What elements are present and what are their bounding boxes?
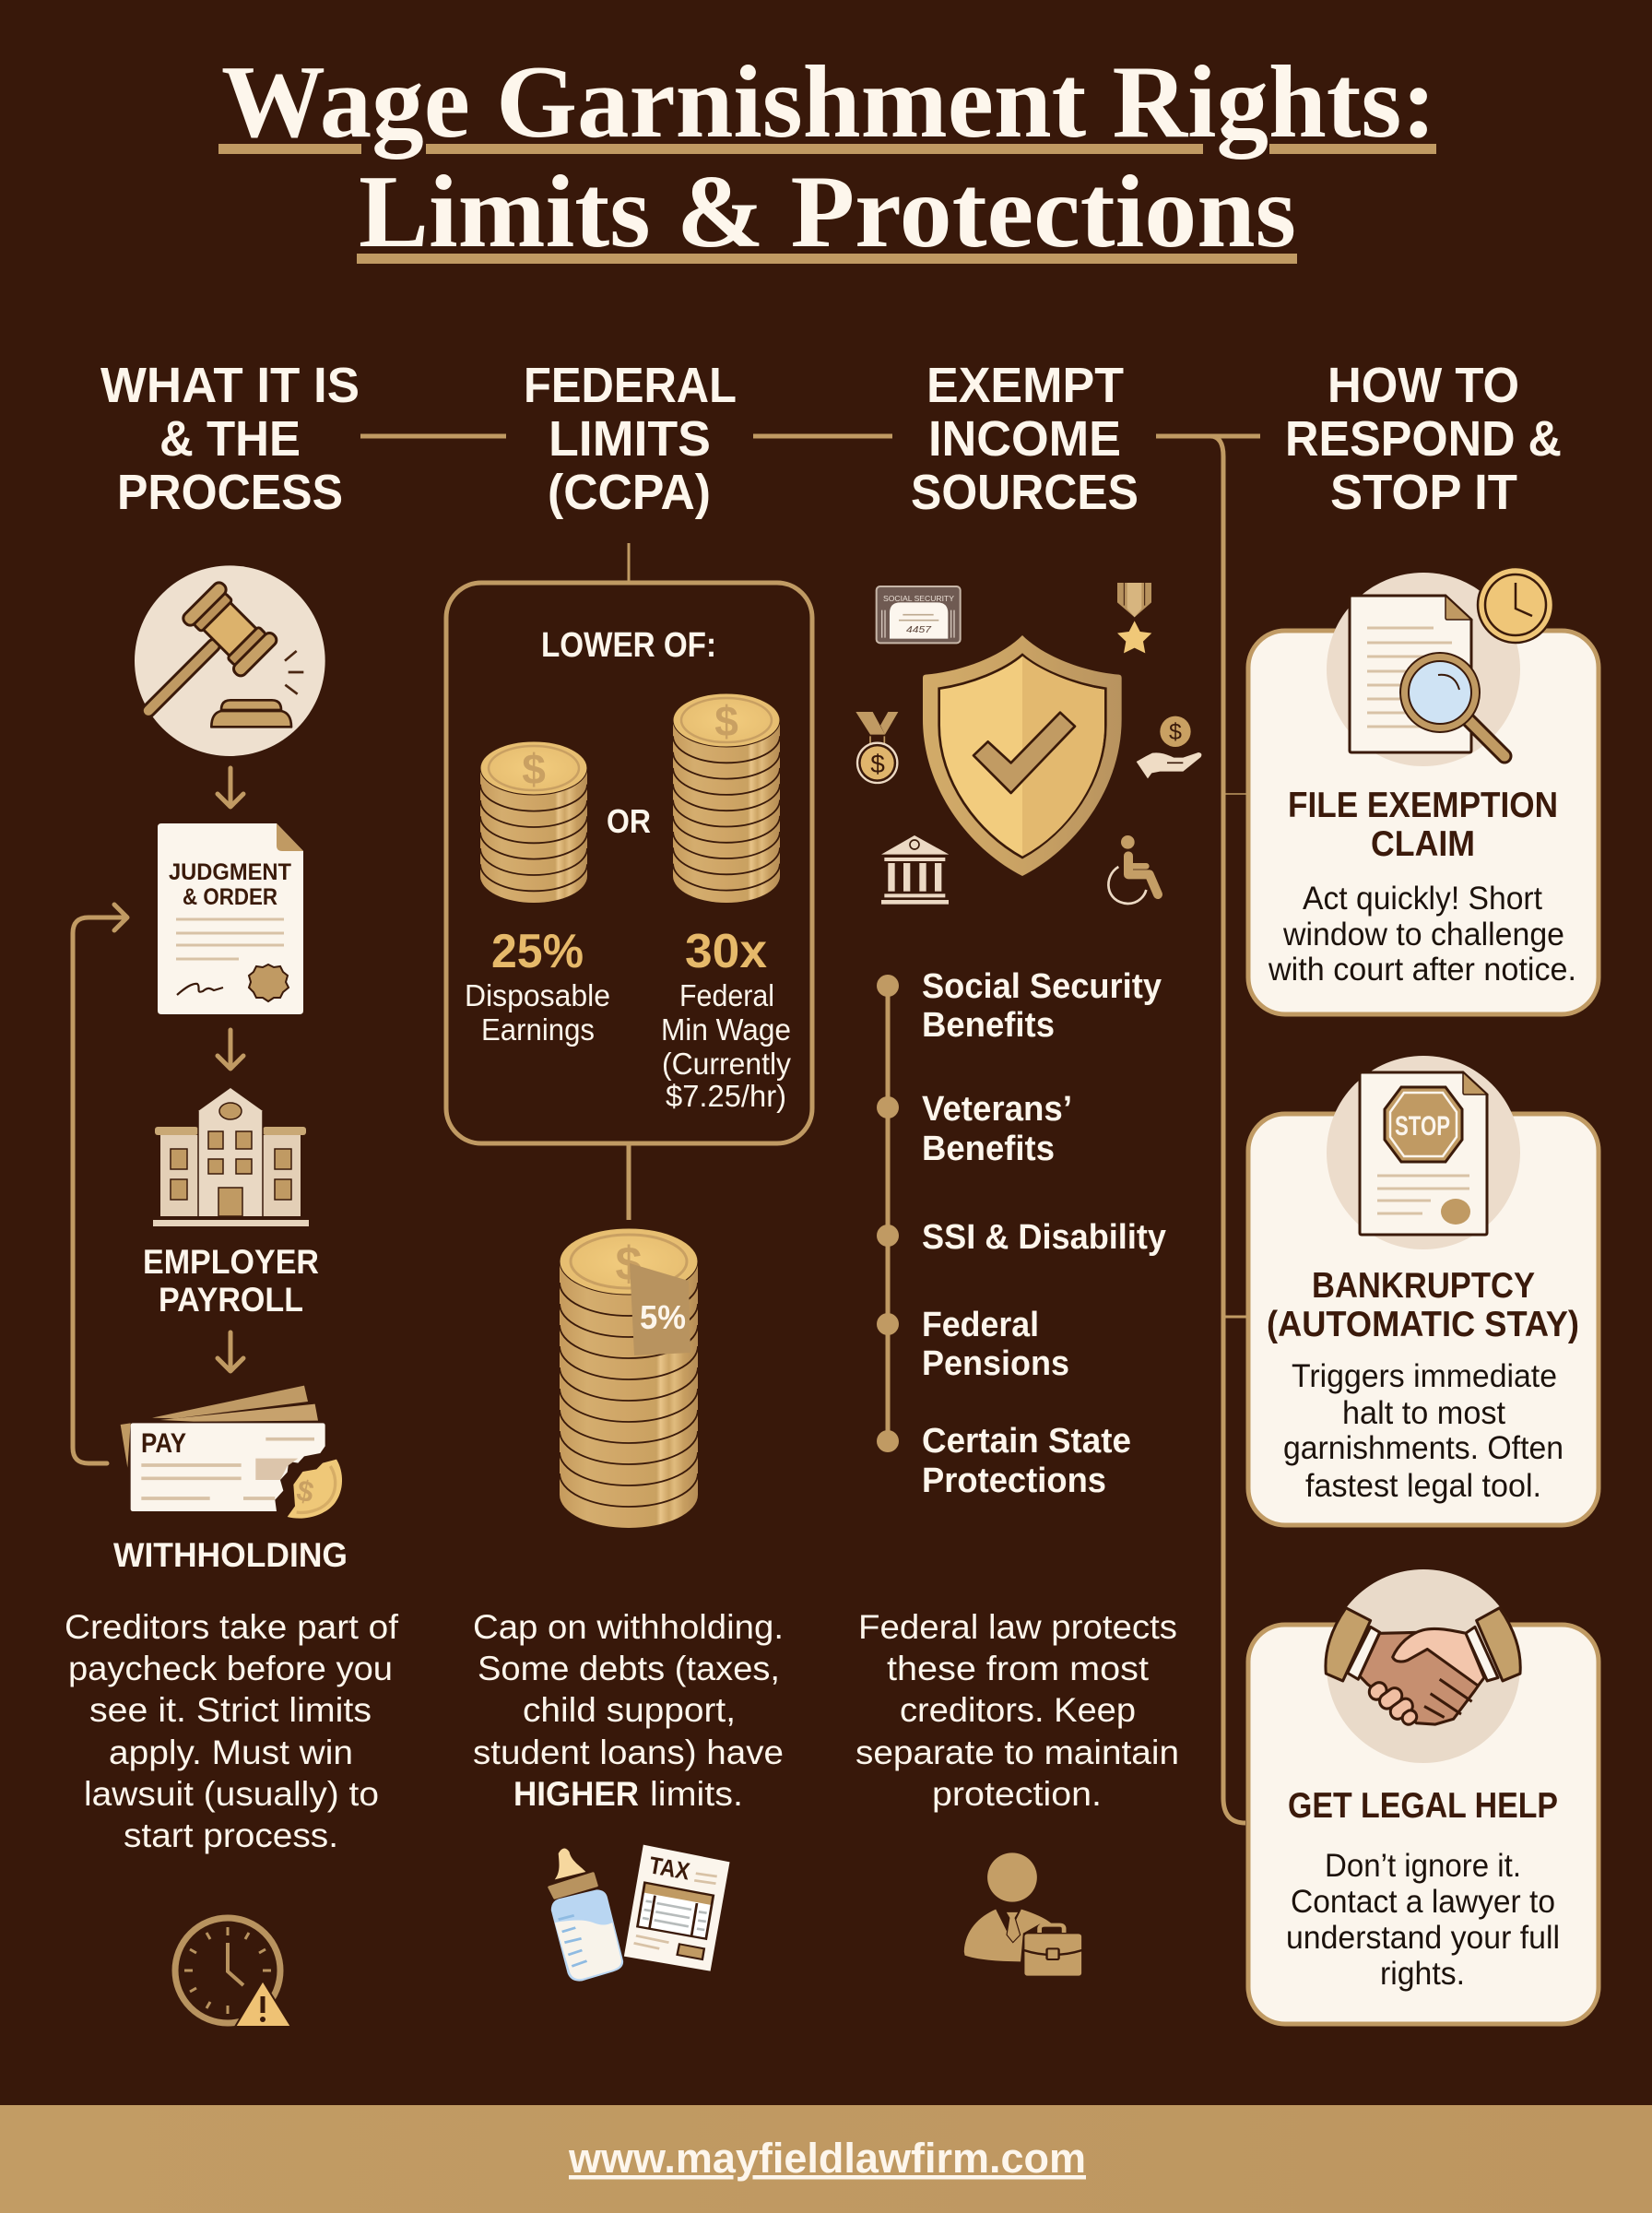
icon: dollar medal	[856, 712, 898, 783]
stat: 30x: $7.25/hr)	[666, 1079, 786, 1113]
icon: tall coin stack	[673, 693, 780, 903]
column heading: how to respond: RESPOND &	[1285, 411, 1562, 467]
column heading: federal limits	[524, 358, 737, 520]
heading: bankruptcy: (AUTOMATIC STAY)	[1267, 1305, 1579, 1344]
title	[218, 45, 1436, 269]
text: exempt description: separate to maintain	[856, 1734, 1179, 1771]
column heading: exempt income	[911, 358, 1139, 520]
text: bankruptcy body: halt to most	[1342, 1395, 1505, 1431]
icon: hand with coin	[1137, 716, 1201, 778]
text: federal limits description	[473, 1608, 784, 1813]
text: federal limits description: Cap on withholding.	[473, 1608, 784, 1646]
label: employer payroll	[143, 1243, 319, 1319]
icon: baby bottle	[549, 1849, 623, 1982]
arrow: judgment to employer	[218, 1030, 243, 1069]
text: file exemption body: with court after notice.	[1268, 952, 1576, 988]
text: legal help body: rights.	[1380, 1956, 1465, 1992]
icon: tax form: TAX	[647, 1851, 692, 1886]
title: Limits & Protections	[359, 155, 1296, 269]
list item: ssi: SSI & Disability	[922, 1218, 1166, 1257]
text: what it is description: lawsuit (usually) to	[84, 1775, 379, 1813]
icon: gavel	[114, 565, 325, 756]
text: what it is description: apply. Must win	[109, 1734, 353, 1771]
arrow: employer to withholding	[218, 1332, 243, 1371]
list item: veterans: Benefits	[922, 1130, 1055, 1168]
icon: judgment document	[158, 823, 303, 1014]
list item: social security: Social Security	[922, 967, 1162, 1006]
icon: paycheck with torn coin: PAY	[141, 1428, 186, 1459]
label: lower of: LOWER OF:	[541, 626, 716, 665]
icon: tax form	[624, 1845, 730, 1971]
text: legal help body: Don’t ignore it.	[1325, 1848, 1521, 1884]
column heading: what it is: & THE	[159, 411, 301, 467]
footer url: www.mayfieldlawfirm.com	[568, 2135, 1086, 2182]
icon: judgment document: & ORDER	[183, 884, 277, 910]
text: what it is description: Creditors take part of	[65, 1608, 399, 1646]
text: exempt description: Federal law protects	[858, 1608, 1177, 1646]
icon: wheelchair	[1108, 835, 1158, 904]
icon: paycheck with torn coin	[121, 1386, 342, 1519]
icon: big coin stack with 5 percent wedge: $	[616, 1237, 643, 1291]
panel: bankruptcy	[1248, 1056, 1599, 1525]
text: exempt description: these from most	[887, 1650, 1150, 1687]
heading: file exemption claim	[1288, 786, 1558, 864]
list item: state protections: Protections	[922, 1462, 1106, 1500]
icon: social security card: 4457	[906, 625, 932, 635]
list item: pensions: Federal	[922, 1306, 1039, 1344]
icon: paycheck with torn coin: $	[294, 1473, 317, 1509]
icon: social security card: SOCIAL SECURITY	[883, 594, 954, 603]
stat: 30x: 30x	[685, 925, 767, 978]
icon: pension bank	[881, 835, 949, 905]
arrow: feedback loop	[73, 905, 127, 1463]
label: 5 percent: 5%	[640, 1298, 686, 1336]
text: federal limits description: child support,	[523, 1691, 736, 1729]
icon: person with briefcase	[964, 1852, 1082, 1976]
list item: social security	[877, 967, 1162, 1045]
text: what it is description: paycheck before you	[68, 1650, 393, 1687]
heading: bankruptcy: BANKRUPTCY	[1312, 1266, 1535, 1306]
column heading: what it is	[100, 358, 360, 520]
title: Wage Garnishment Rights:	[221, 45, 1436, 160]
text: bankruptcy body: Triggers immediate	[1292, 1358, 1557, 1394]
text: what it is description: see it. Strict limits	[89, 1691, 372, 1729]
list item: state protections	[877, 1422, 1131, 1500]
icon: short coin stack	[480, 741, 587, 903]
list item: veterans	[877, 1090, 1072, 1168]
stat: 25 percent: Earnings	[481, 1012, 595, 1047]
icon: dollar medal: $	[870, 750, 885, 778]
column heading: federal limits: FEDERAL	[524, 358, 737, 413]
text: bankruptcy body: fastest legal tool.	[1305, 1468, 1541, 1504]
icon: clock with warning	[175, 1918, 291, 2027]
text: federal limits description: student loans) have	[473, 1734, 784, 1771]
text: exempt description	[856, 1608, 1179, 1813]
stat: 25 percent: 25%	[491, 925, 584, 978]
icon: document with magnifier and clock	[1350, 567, 1553, 756]
text: legal help body	[1286, 1848, 1560, 1992]
text: legal help body: understand your full	[1286, 1920, 1560, 1956]
heading: file exemption claim: CLAIM	[1371, 824, 1475, 864]
column heading: how to respond: HOW TO	[1328, 358, 1519, 413]
text: file exemption body: Act quickly! Short	[1303, 881, 1542, 917]
column heading: exempt income: SOURCES	[911, 465, 1139, 520]
connectors between columns	[360, 436, 1260, 1823]
list item: pensions: Pensions	[922, 1344, 1069, 1383]
icon: short coin stack: $	[522, 745, 546, 793]
stat: 30x: (Currently	[662, 1047, 791, 1081]
panel: lower of box	[446, 583, 812, 1143]
heading: bankruptcy	[1267, 1266, 1579, 1344]
column heading: exempt income: EXEMPT	[926, 358, 1124, 413]
stat: 30x: Federal	[679, 978, 774, 1012]
text: bankruptcy body	[1283, 1358, 1564, 1504]
icon: handshake	[1326, 1608, 1520, 1727]
label: employer payroll: EMPLOYER	[143, 1243, 319, 1281]
stat: 25 percent: Disposable	[465, 978, 610, 1012]
text: file exemption body: window to challenge	[1282, 917, 1564, 953]
text: federal limits description: limits.	[650, 1775, 743, 1813]
list: exempt income sources	[877, 967, 1166, 1500]
text: what it is description	[65, 1608, 399, 1854]
text: what it is description: start process.	[124, 1817, 338, 1854]
text: federal limits description: HIGHER	[513, 1775, 639, 1813]
arrow: gavel to judgment	[218, 768, 243, 807]
heading: get legal help: GET LEGAL HELP	[1288, 1786, 1558, 1826]
icon: star medal	[1117, 583, 1151, 653]
list item: pensions	[877, 1306, 1069, 1383]
column heading: what it is: PROCESS	[117, 465, 343, 520]
label: withholding: WITHHOLDING	[113, 1536, 348, 1574]
heading: file exemption claim: FILE EXEMPTION	[1288, 786, 1558, 825]
text: file exemption body	[1268, 881, 1576, 988]
list item: state protections: Certain State	[922, 1422, 1131, 1461]
icon: tall coin stack: $	[714, 697, 738, 745]
icon: social security card	[877, 586, 961, 643]
column heading: how to respond	[1285, 358, 1562, 520]
icon: big coin stack with 5 percent wedge	[560, 1228, 698, 1528]
label: or: OR	[607, 802, 651, 840]
icon: stop document: STOP	[1395, 1111, 1450, 1142]
label: employer payroll: PAYROLL	[159, 1281, 303, 1319]
list item: social security: Benefits	[922, 1006, 1055, 1045]
text: exempt description: protection.	[932, 1775, 1102, 1813]
panel: get legal help	[1248, 1569, 1599, 2024]
icon: judgment document: JUDGMENT	[169, 859, 291, 885]
column heading: federal limits: LIMITS	[549, 411, 711, 467]
text: legal help body: Contact a lawyer to	[1291, 1884, 1555, 1920]
icon: shield with check	[923, 635, 1122, 876]
icon: hand with coin: $	[1169, 719, 1182, 745]
column heading: how to respond: STOP IT	[1330, 465, 1517, 520]
icon: stop document	[1360, 1072, 1487, 1235]
column heading: federal limits: (CCPA)	[548, 465, 711, 520]
footer band	[0, 2105, 1652, 2213]
stat: 30x: Min Wage	[661, 1012, 791, 1047]
stat: 25 percent	[465, 925, 610, 1047]
list item: veterans: Veterans’	[922, 1090, 1072, 1129]
text: federal limits description: Some debts (taxes,	[478, 1650, 780, 1687]
stat: 30x	[661, 925, 791, 1113]
text: exempt description: creditors. Keep	[900, 1691, 1136, 1729]
column heading: what it is: WHAT IT IS	[100, 358, 360, 413]
text: bankruptcy body: garnishments. Often	[1283, 1430, 1564, 1466]
column heading: exempt income: INCOME	[928, 411, 1121, 467]
panel: file exemption claim	[1248, 567, 1599, 1014]
icon: employer building	[153, 1088, 309, 1226]
